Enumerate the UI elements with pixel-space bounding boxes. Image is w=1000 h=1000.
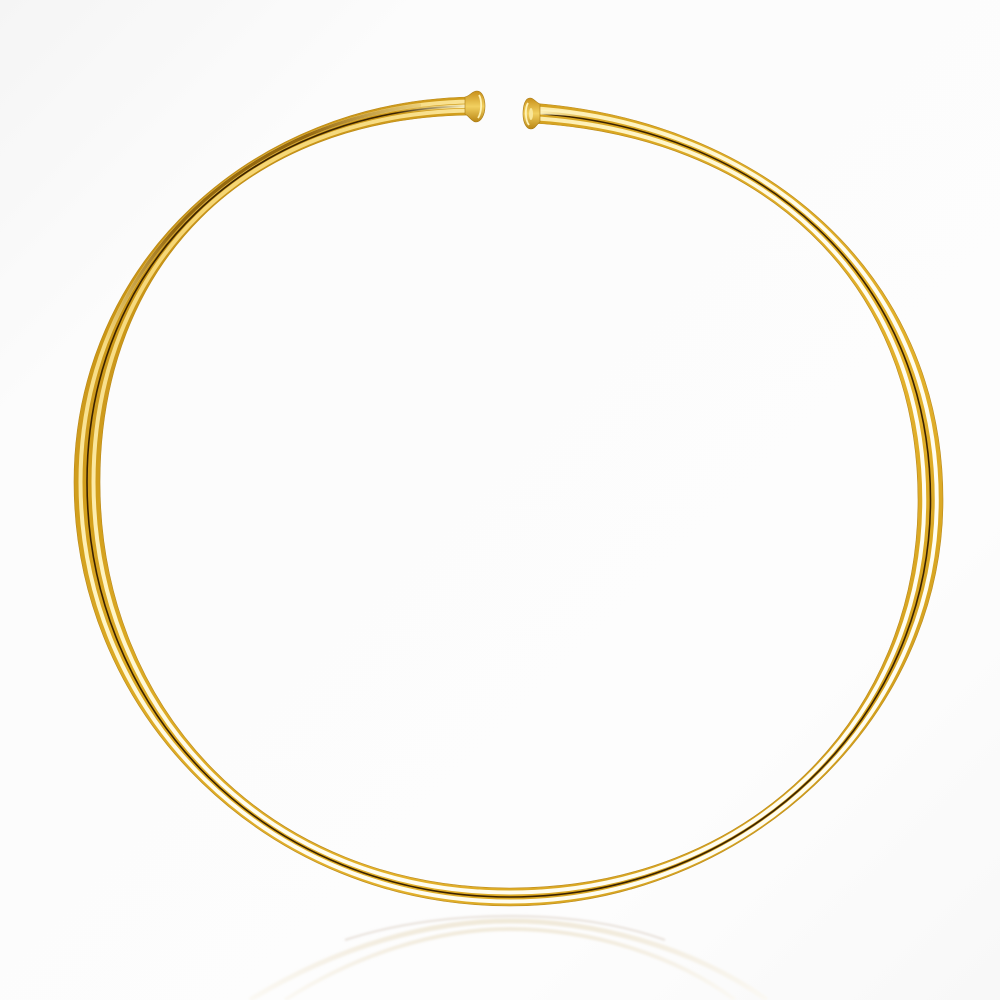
- right end cap: [523, 98, 600, 129]
- left cap rim: [478, 95, 481, 118]
- bangle body: [74, 97, 943, 906]
- left tube highlight: [395, 106, 468, 112]
- left flare: [465, 91, 485, 122]
- right tube highlight: [538, 112, 600, 117]
- gold band: [74, 97, 943, 906]
- dark reflection on upper left: [80, 102, 937, 902]
- right flare: [523, 98, 540, 129]
- right cap dimple: [529, 108, 533, 120]
- left end cap: [395, 91, 485, 122]
- inner highlight strand: [94, 110, 924, 892]
- floor reflection: [250, 916, 767, 1000]
- right cap rim: [526, 103, 529, 125]
- outer highlight strand: [80, 102, 937, 902]
- dark crease line: [87, 106, 930, 897]
